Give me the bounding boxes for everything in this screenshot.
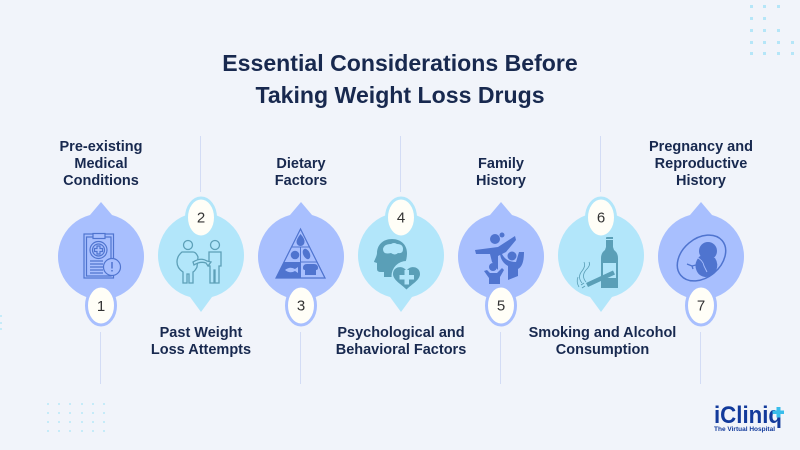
title: Taking Weight Loss Drugs (255, 82, 545, 108)
label: step 3: Dietary (276, 156, 326, 172)
badge: 4 (386, 198, 416, 237)
panel: step 2 past weight loss attempts (151, 198, 251, 358)
teardrop: step 2 (158, 212, 244, 312)
icon: medical clipboard (84, 234, 120, 278)
label: step 1: Conditions (63, 173, 139, 189)
icon: head with brain and heart (374, 239, 422, 291)
logo: iCliniq: iCliniq (714, 402, 782, 429)
title (222, 50, 578, 108)
badge: 2: 2 (197, 210, 205, 226)
badge: 1 (86, 286, 116, 325)
teardrop: step 7 (658, 202, 744, 300)
label: step 5: History (476, 173, 526, 189)
badge: 5: 5 (497, 298, 505, 314)
teardrop: step 4 (358, 212, 444, 312)
logo: iCliniq: The Virtual Hospital (714, 426, 775, 433)
icon: fetus in womb (668, 226, 735, 290)
teardrop: step 6 (558, 212, 644, 312)
icon: food pyramid (276, 229, 325, 278)
label: step 6: Smoking and Alcohol (529, 325, 676, 341)
badge: 3: 3 (297, 298, 305, 314)
panel: step 6 smoking and alcohol consumption (529, 198, 676, 358)
panel: step 4 psychological and behavioral factors (336, 198, 466, 358)
title: Essential Considerations Before (222, 50, 578, 76)
badge: 6: 6 (597, 210, 605, 226)
label: step 3: Factors (275, 173, 327, 189)
panel: step 1 pre-existing medical conditions (58, 139, 144, 325)
badge: 7: 7 (697, 298, 705, 314)
badge: 4: 4 (397, 210, 405, 226)
label: step 6: Consumption (556, 342, 649, 358)
teardrop: step 3 (258, 202, 344, 300)
panel: step 7 pregnancy and reproductive history (649, 139, 753, 325)
badge: 6 (586, 198, 616, 237)
label: step 7: Pregnancy and (649, 139, 753, 155)
badge: 7 (686, 286, 716, 325)
badge: 3 (286, 286, 316, 325)
label: step 1: Medical (74, 156, 128, 172)
label: step 5: Family (478, 156, 524, 172)
icon: bottle and cigarette (577, 237, 618, 288)
badge: 5 (486, 286, 516, 325)
teardrop: step 1 (58, 202, 144, 300)
label: step 1: Pre-existing (60, 139, 142, 155)
icon: weight change figures (177, 240, 221, 283)
label: step 4: Behavioral Factors (336, 342, 466, 358)
label: step 2: Loss Attempts (151, 342, 251, 358)
panel: step 3 dietary factors (258, 156, 344, 325)
badge: 1: 1 (97, 298, 105, 315)
label: step 4: Psychological and (337, 325, 465, 341)
icon: family figures (475, 232, 524, 284)
label: step 7: Reproductive (655, 156, 747, 172)
label: step 2: Past Weight (160, 325, 243, 341)
teardrop: step 5 (458, 202, 544, 300)
panel: step 5 family history (458, 156, 544, 325)
badge: 2 (186, 198, 216, 237)
label: step 7: History (676, 173, 726, 189)
